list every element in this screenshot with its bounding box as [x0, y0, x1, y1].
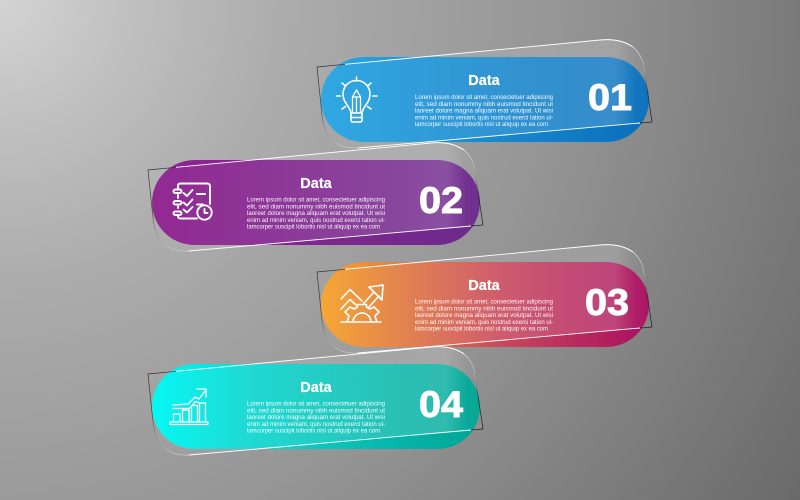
- glass frame 04: [148, 346, 483, 455]
- number: 04: [419, 384, 463, 425]
- body text: enim ad minim veniam, quis nostrud exerci tation ul-: [247, 217, 385, 224]
- body text: laoreet dolore magna aliquam erat volutpat. Ut wisi: [415, 108, 553, 114]
- body text: laoreet dolore magna aliquam erat volutpat. Ut wisi: [415, 312, 553, 319]
- pill 01: [321, 57, 649, 142]
- body text: laoreet dolore magna aliquam erat volutpat. Ut wisi: [247, 210, 385, 217]
- number: 02: [419, 180, 463, 221]
- pill 02: [152, 160, 480, 245]
- icon: gear with growth arrow: [341, 285, 383, 322]
- panel: card 01: [317, 39, 652, 148]
- body text: elit, sed diam nonummy nibh euismod tincidunt ut: [415, 305, 553, 312]
- pill 04: [152, 364, 480, 449]
- pill 03: [321, 262, 649, 347]
- body text: elit, sed diam nonummy nibh euismod tincidunt ut: [247, 407, 385, 414]
- glass frame 01: [317, 39, 652, 148]
- heading: Data: [300, 380, 333, 396]
- icon: checklist with clock: [174, 184, 212, 220]
- icon: light bulb with pencil: [336, 77, 377, 122]
- body text: laoreet dolore magna aliquam erat volutpat. Ut wisi: [247, 414, 385, 421]
- body text: [415, 298, 553, 332]
- number: 01: [588, 77, 632, 118]
- body text: Lorem ipsum dolor sit amet, consectetuer adipiscing: [247, 400, 385, 408]
- icon: bar chart with rising arrow: [170, 389, 208, 424]
- body text: [415, 94, 553, 128]
- glass frame 03: [317, 244, 652, 353]
- heading: Data: [300, 176, 333, 192]
- body text: Lorem ipsum dolor sit amet, consectetuer adipiscing: [415, 298, 553, 306]
- body text: Lorem ipsum dolor sit amet, consectetuer adipiscing: [415, 94, 553, 101]
- body text: elit, sed diam nonummy nibh euismod tincidunt ut: [415, 101, 553, 108]
- panel: card 04: [148, 346, 483, 455]
- body text: lamcorper suscipit lobortis nisl ut aliquip ex ea com: [247, 428, 380, 434]
- glass frame 02: [148, 142, 483, 251]
- body text: lamcorper suscipit lobortis nisl ut aliquip ex ea com: [247, 224, 380, 230]
- body text: [247, 400, 385, 434]
- body text: Lorem ipsum dolor sit amet, consectetuer adipiscing: [247, 196, 385, 204]
- body text: enim ad minim veniam, quis nostrud exerci tation ul-: [415, 319, 553, 326]
- body text: enim ad minim veniam, quis nostrud exerci tation ul-: [415, 114, 553, 121]
- body text: [247, 196, 385, 230]
- body text: elit, sed diam nonummy nibh euismod tincidunt ut: [247, 203, 385, 210]
- heading: Data: [468, 73, 501, 89]
- panel: card 03: [317, 244, 652, 353]
- body text: lamcorper suscipit lobortis nisl ut aliquip ex ea com: [415, 121, 548, 128]
- body text: lamcorper suscipit lobortis nisl ut aliquip ex ea com: [415, 326, 548, 332]
- heading: Data: [468, 278, 501, 294]
- number: 03: [585, 282, 629, 323]
- body text: enim ad minim veniam, quis nostrud exerci tation ul-: [247, 421, 385, 428]
- panel: card 02: [148, 142, 483, 251]
